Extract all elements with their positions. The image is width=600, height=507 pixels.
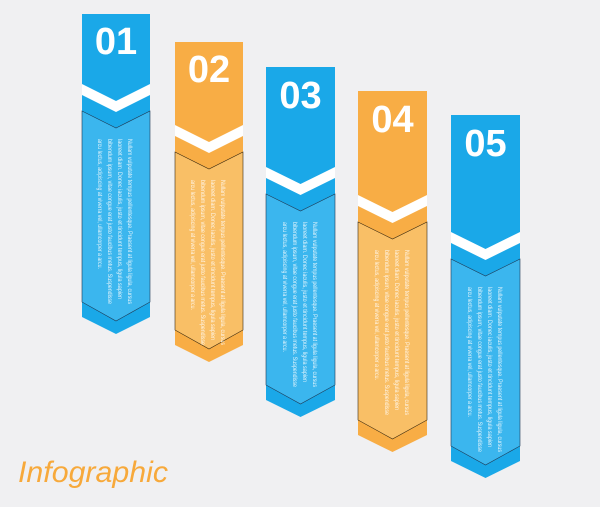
column 04 bbox=[358, 91, 427, 452]
column 05: 05 bbox=[464, 123, 507, 165]
column 04: 04 bbox=[371, 99, 414, 141]
title: Infographic bbox=[18, 456, 168, 489]
column 03 bbox=[266, 67, 335, 417]
column 01: 01 bbox=[95, 21, 137, 63]
column 05 bbox=[451, 115, 520, 478]
column 01 bbox=[82, 14, 150, 334]
column 02 bbox=[175, 42, 243, 362]
column 03: 03 bbox=[279, 75, 322, 117]
column 02: 02 bbox=[188, 49, 230, 91]
